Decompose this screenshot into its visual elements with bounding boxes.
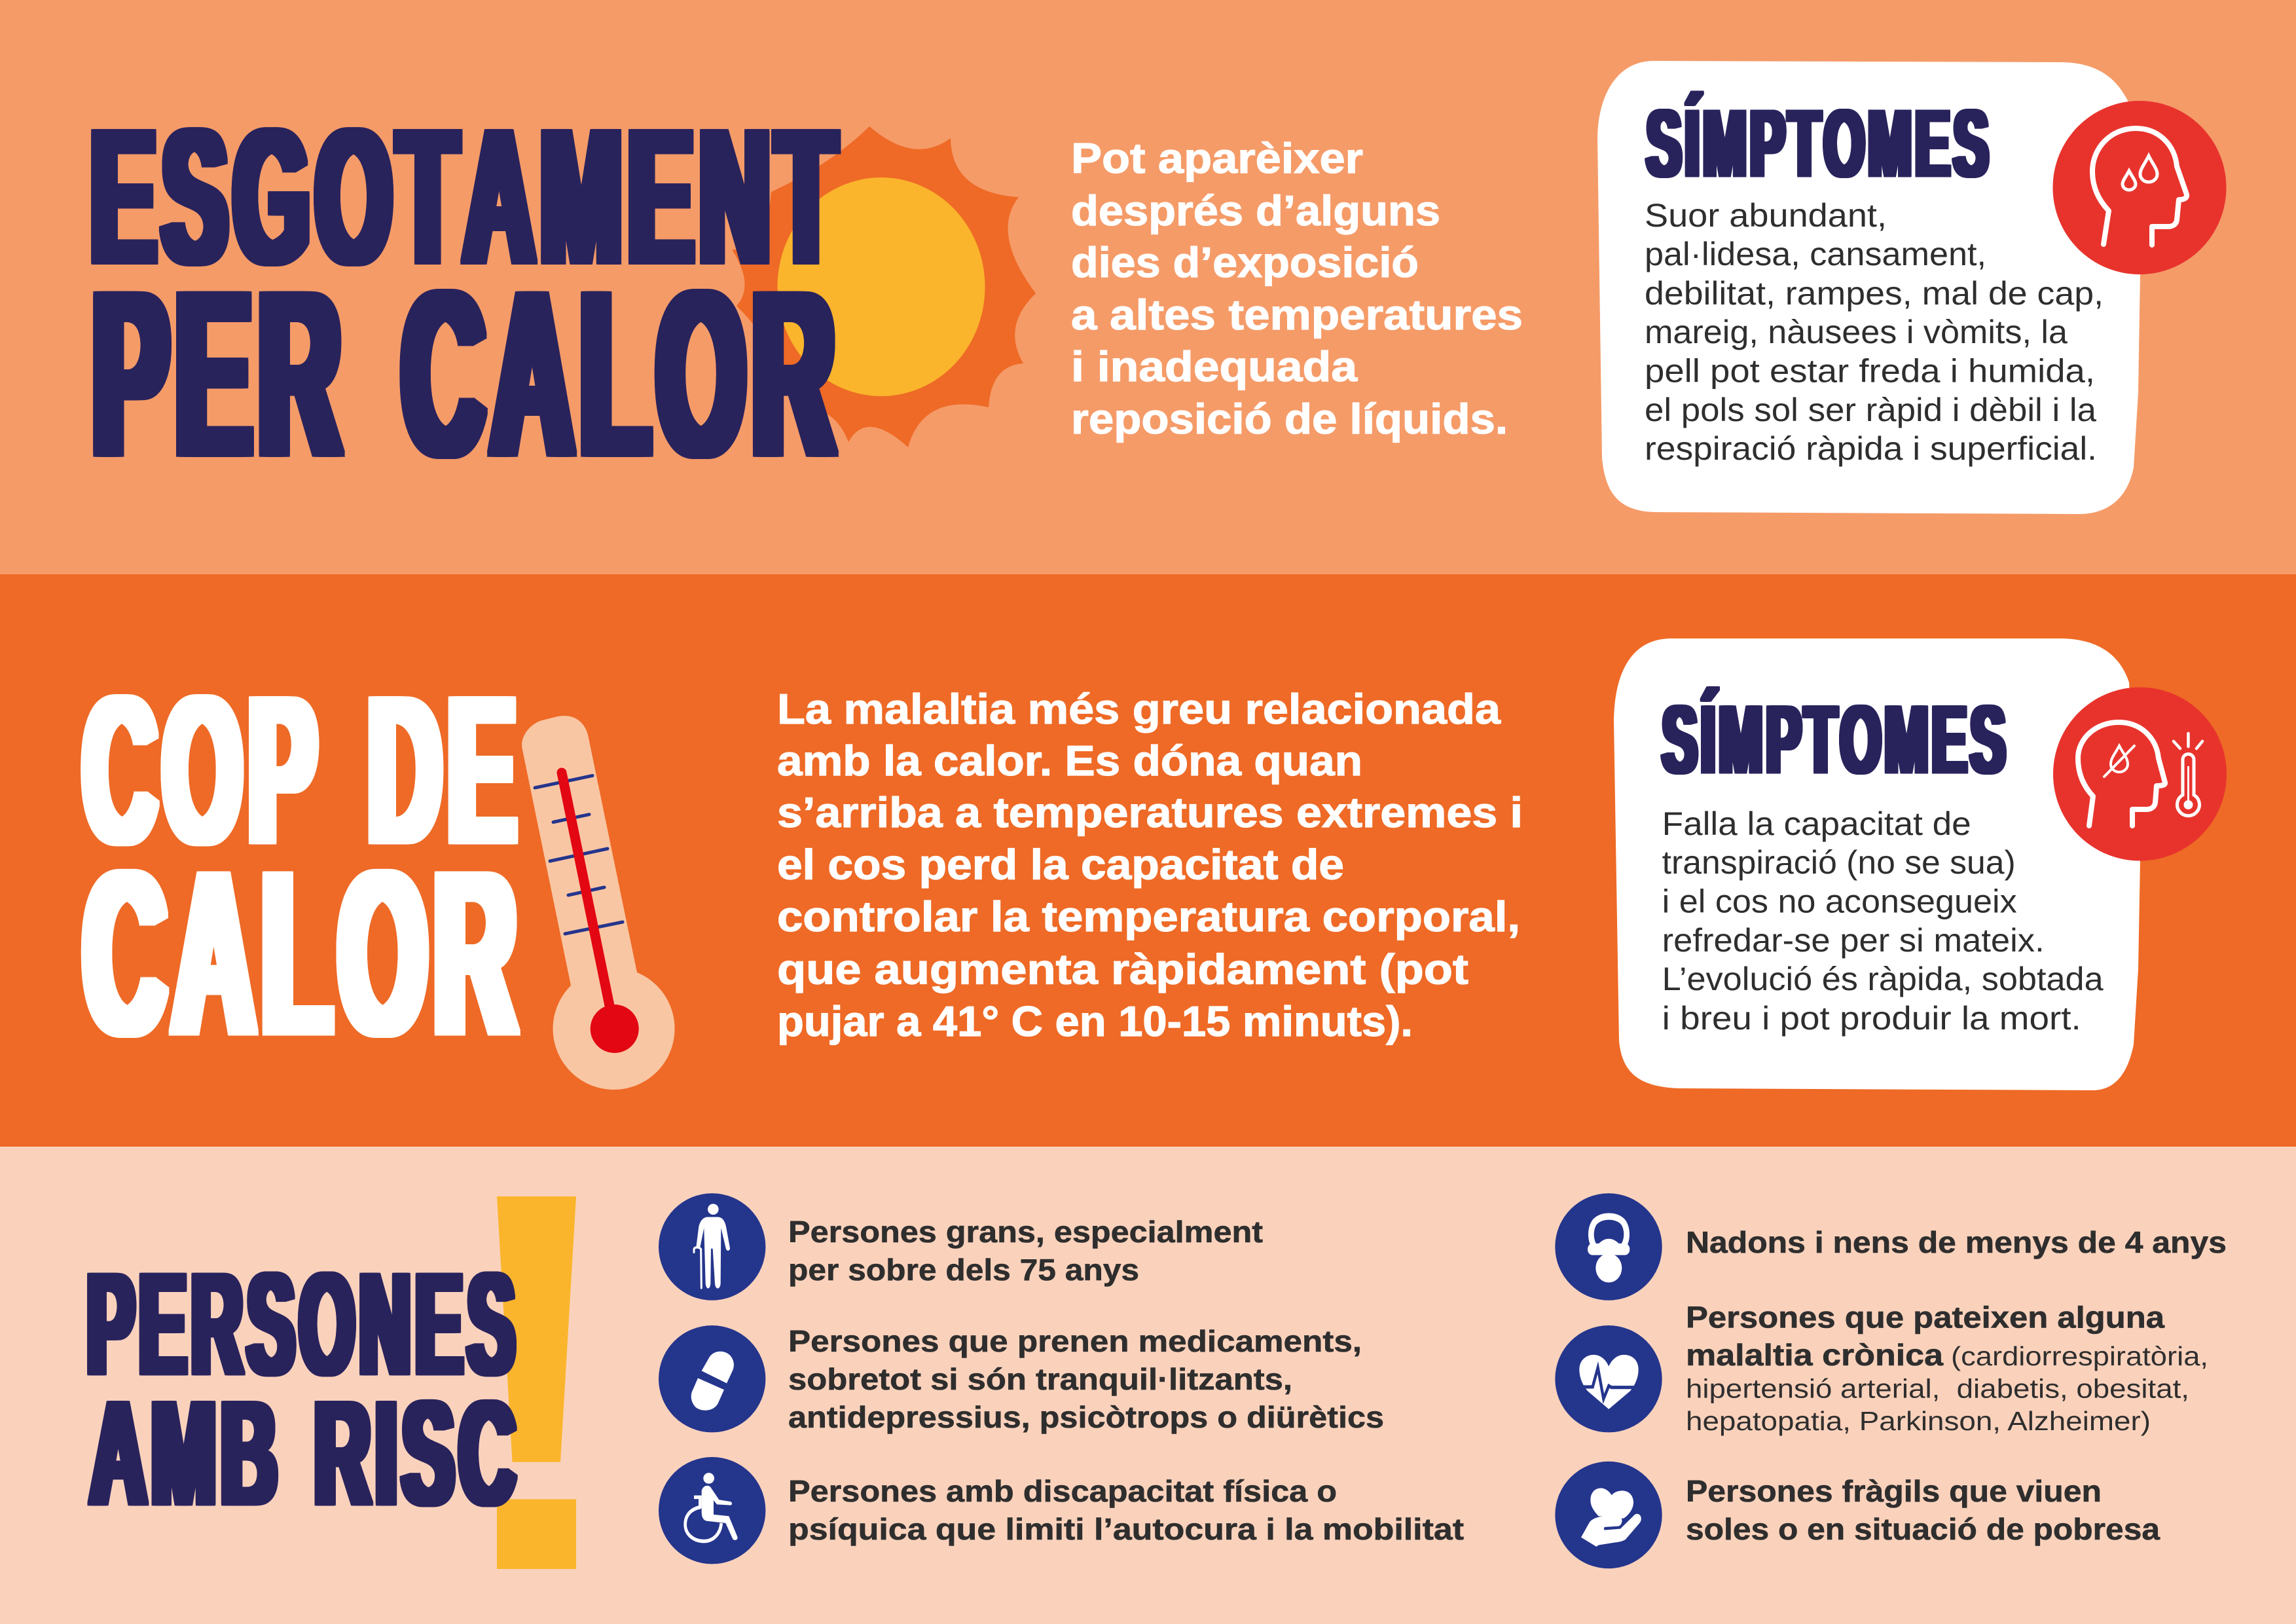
text block: medication: Persones que prenen medicaments, [788,1324,1362,1358]
text block: disability: Persones amb discapacitat física o [788,1474,1337,1508]
text block: description: que augmenta ràpidament (pot [777,945,1468,993]
text block: disability: psíquica que limiti l’autocura i la mobilitat [788,1512,1464,1546]
title: persones amb risc: PERSONES [87,1243,520,1405]
title: cop de calor: COP DE [83,653,522,887]
text block: symptoms: Falla la capacitat de [1662,805,1971,842]
text block: symptoms: mareig, nàusees i vòmits, la [1645,314,2068,350]
title: esgotament per calor: PER CALOR [93,243,842,504]
text block: description: La malaltia més greu relacionada [777,685,1501,733]
text block: chronic illness: (cardiorrespiratòria, [1951,1341,2208,1371]
panel: symptom card [1614,638,2140,1090]
text block: elderly: per sobre dels 75 anys [788,1253,1139,1287]
text block: symptoms: debilitat, rampes, mal de cap, [1645,275,2104,312]
icon: exclamation mark [497,1196,576,1569]
text block: symptoms: el pols sol ser ràpid i dèbil i la [1645,392,2096,428]
text block: fragile people: Persones fràgils que viuen [1686,1474,2102,1508]
title: cop de calor [81,653,523,1083]
panel: cop de calor [0,574,2296,1147]
text block: description: a altes temperatures [1071,291,1523,339]
heading: simptomes: SÍMPTOMES [1647,90,1992,196]
panel: symptom card [1597,61,2140,514]
text block: fragile people: soles o en situació de pobresa [1686,1512,2160,1546]
icon: hand holding heart [1555,1462,1662,1568]
text block: description: després d’alguns [1071,187,1440,234]
text block: description: Pot aparèixer [1071,134,1363,182]
icon: head no sweat with thermometer [2053,688,2227,860]
title: esgotament per calor: ESGOTAMENT [91,90,843,303]
text block: fragile people [1686,1474,2160,1546]
text block: symptoms [1645,197,2104,467]
text block: description: controlar la temperatura corporal, [777,893,1520,940]
title: persones amb risc: AMB RISC [90,1370,520,1536]
icon: thermometer [522,716,675,1090]
text block: symptoms: i breu i pot produir la mort. [1662,1000,2081,1037]
panel: persones amb risc [0,1147,2296,1624]
text block: description: s’arriba a temperatures extremes i [777,788,1523,836]
icon: wheelchair [659,1457,765,1564]
text block: chronic illness: Persones que pateixen alguna [1686,1301,2164,1335]
icon: heart with pulse [1555,1325,1662,1432]
text block: symptoms: pal·lidesa, cansament, [1645,236,1986,272]
text block: elderly: Persones grans, especialment [788,1215,1263,1249]
text block: medication: antidepressius, psicòtrops o diürètics [788,1400,1384,1434]
text block: description [1071,134,1523,443]
title: esgotament per calor [91,90,843,504]
text block: babies: Nadons i nens de menys de 4 anys [1686,1225,2227,1259]
text block: disability [788,1474,1464,1546]
icon: elderly person [659,1193,765,1301]
text block: symptoms: pell pot estar freda i humida, [1645,352,2095,389]
text block: symptoms: Suor abundant, [1645,197,1887,234]
text block: description: dies d’exposició [1071,238,1419,286]
text block: description: el cos perd la capacitat de [777,841,1344,889]
icon: pill [659,1325,765,1432]
text block: symptoms [1662,805,2104,1037]
icon: pacifier [1555,1193,1662,1301]
text block: chronic illness [1686,1301,2208,1436]
text block: symptoms: transpiració (no se sua) [1662,844,2016,881]
text block: description: amb la calor. Es dóna quan [777,737,1362,784]
text block: medication: sobretot si són tranquil·litzants, [788,1362,1292,1396]
icon: sun [732,126,1036,447]
text block: description: pujar a 41° C en 10-15 minuts). [777,997,1413,1045]
text block: elderly [788,1215,1263,1287]
text block: symptoms: L’evolució és ràpida, sobtada [1662,961,2104,997]
panel: esgotament per calor [0,0,2296,574]
text block: symptoms: refredar-se per si mateix. [1662,922,2045,959]
text block: chronic illness: malaltia crònica [1686,1338,1943,1372]
text block: chronic illness: hipertensió arterial, diabetis, obesitat, [1686,1373,2189,1403]
text block: description: reposició de líquids. [1071,395,1508,443]
text block: description [777,685,1523,1045]
text block: description: i inadequada [1071,342,1358,390]
title: cop de calor: CALOR [84,824,523,1083]
icon: head sweating [2053,101,2226,274]
text block: chronic illness: hepatopatia, Parkinson, Alzheimer) [1686,1406,2151,1436]
text block: symptoms: i el cos no aconsegueix [1662,883,2017,919]
heading: simptomes: SÍMPTOMES [1662,686,2009,794]
text block: medication [788,1324,1384,1434]
text block: symptoms: respiració ràpida i superficial. [1645,430,2097,467]
title: persones amb risc [87,1243,520,1536]
